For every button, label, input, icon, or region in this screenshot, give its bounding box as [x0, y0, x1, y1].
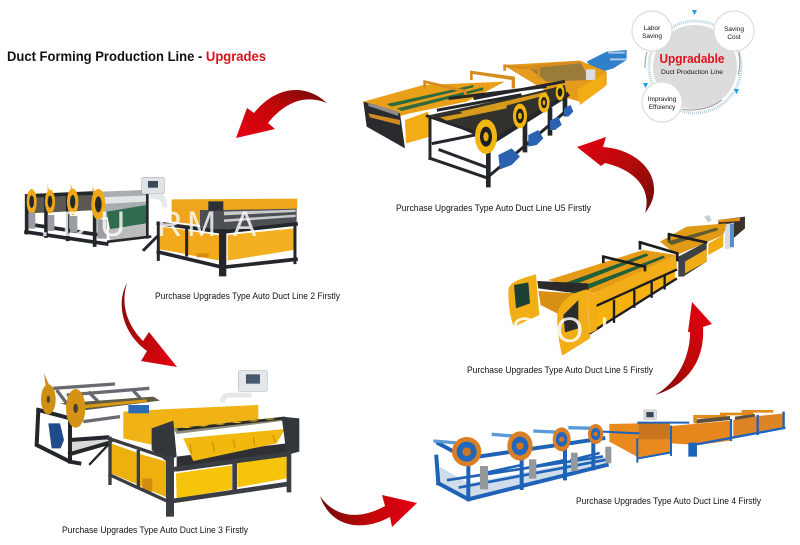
caption: line 4: Purchase Upgrades Type Auto Duct Line 4 Firstly	[576, 496, 761, 506]
circle: saving cost	[714, 11, 754, 51]
decoiler frames	[488, 95, 567, 185]
lower frame	[108, 438, 289, 513]
main table	[363, 82, 505, 116]
far blue section	[587, 50, 627, 73]
press machine	[609, 423, 670, 457]
lower panels	[111, 443, 167, 497]
far tables	[672, 421, 730, 445]
arrow: line 2 down to line 3	[122, 283, 177, 367]
heading: upgradable: Upgradable	[660, 51, 724, 66]
far end	[718, 217, 745, 238]
motors	[480, 447, 611, 489]
dashed ring	[649, 21, 741, 113]
machine: Auto Duct Line 3	[37, 371, 299, 513]
machine: Auto Duct Line 5	[508, 215, 745, 356]
decoiler frame	[28, 194, 98, 213]
main body	[123, 405, 258, 445]
coil sheet	[102, 190, 148, 218]
arrow: line 5 to U5	[577, 137, 654, 213]
circle: saving cost: Saving	[724, 26, 744, 33]
caption: line 3: Purchase Upgrades Type Auto Duct Line 3 Firstly	[62, 525, 248, 535]
caption: line U5: Purchase Upgrades Type Auto Duct Line U5 Firstly	[396, 203, 591, 213]
outer arcs	[645, 52, 740, 110]
machine: Auto Duct Line 2	[26, 177, 297, 273]
circle: labor saving: Saving	[642, 33, 662, 40]
reels	[475, 84, 564, 154]
circle: saving cost: Cost	[727, 34, 741, 41]
watermark fragment on line 5: COL	[511, 311, 619, 350]
central disc	[653, 25, 737, 109]
rails	[603, 234, 706, 270]
reels	[452, 424, 603, 466]
decoiler frame	[438, 457, 605, 498]
title: Duct Forming Production Line - Upgrades	[7, 48, 266, 64]
panel	[238, 371, 267, 391]
circle: labor saving	[632, 11, 672, 51]
motors	[498, 105, 573, 169]
watermark letters upper: .DURMA	[40, 205, 257, 244]
doors	[538, 291, 577, 322]
circle: improving efficiency: Impraving	[648, 96, 677, 103]
rear sections	[503, 61, 607, 102]
diagram: upgradable cycle	[632, 10, 754, 122]
decoiler rails	[53, 384, 149, 422]
main deck	[548, 250, 677, 293]
caption: line 2: Purchase Upgrades Type Auto Duct Line 2 Firstly	[155, 291, 340, 301]
control panel	[142, 177, 164, 194]
arrow: line 3 to line 4	[320, 495, 417, 527]
machine: Auto Duct Line U5	[363, 50, 627, 185]
arrow: line 4 to line 5	[655, 302, 712, 395]
caption: line 5: Purchase Upgrades Type Auto Duct Line 5 Firstly	[467, 365, 653, 375]
circle: improving efficiency	[642, 82, 682, 122]
arrow: top swoosh toward line 2	[236, 90, 327, 138]
circle: improving efficiency: Effoiency	[649, 104, 676, 111]
forming machine	[200, 208, 297, 232]
decoiler deck	[430, 85, 567, 142]
circle: labor saving: Labor	[644, 25, 661, 32]
icon: blue markers	[643, 10, 739, 94]
machine: Auto Duct Line 4	[433, 410, 784, 499]
second deck	[660, 223, 727, 255]
subheading: Duct Production Line	[661, 69, 723, 76]
